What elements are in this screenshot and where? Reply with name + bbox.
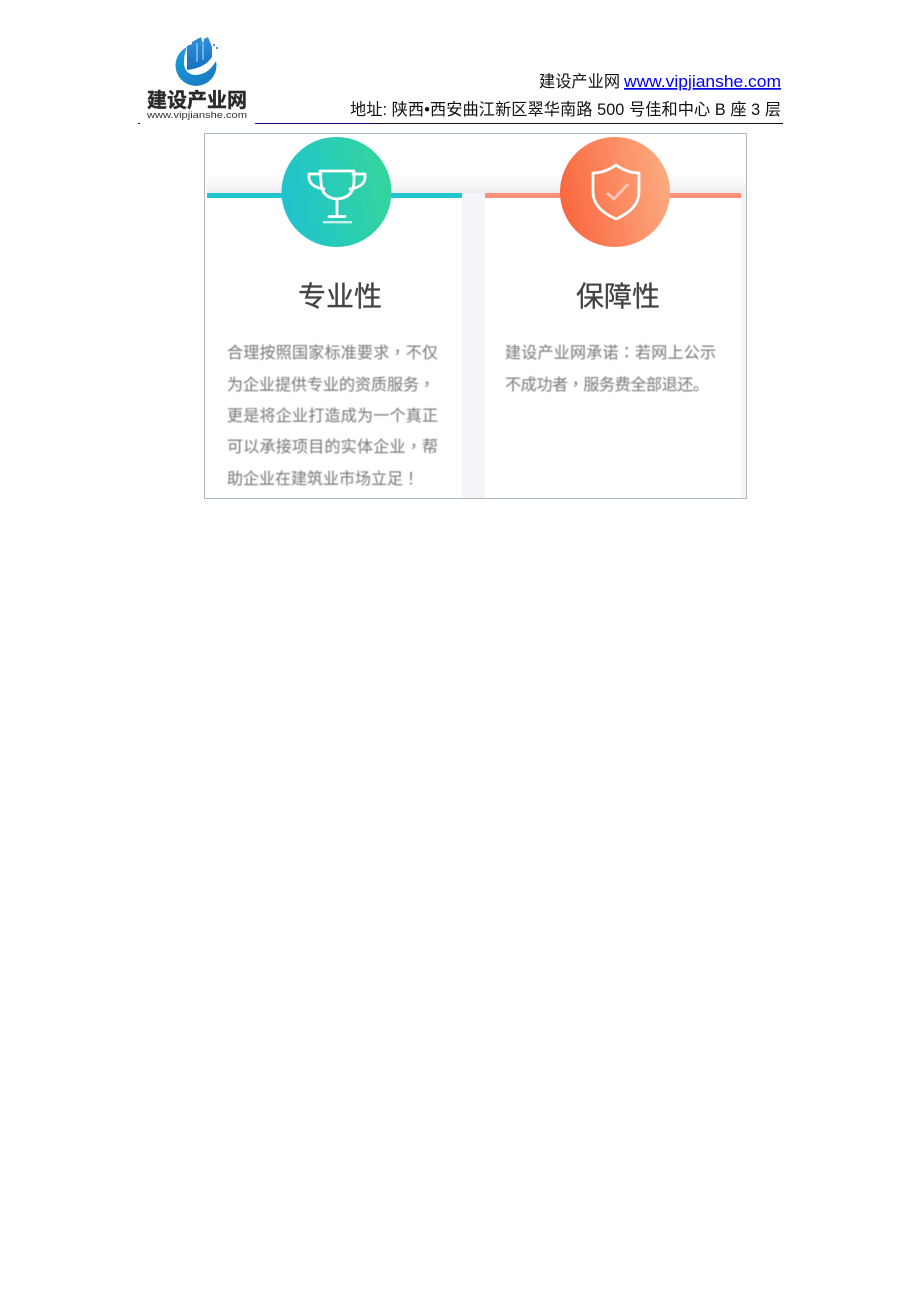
header rule	[138, 123, 783, 124]
body text: 更是将企业打造成为一个真正	[227, 407, 438, 425]
accent bar	[207, 193, 462, 198]
logo	[146, 37, 247, 121]
heading: 保障性	[576, 281, 660, 312]
icon: logo crescent	[175, 47, 216, 86]
logo url: www.vipjianshe.com	[146, 110, 247, 121]
heading: 专业性	[298, 281, 382, 312]
panel: 专业性	[207, 137, 462, 489]
gutter shadow	[462, 193, 485, 498]
body text: 不成功者，服务费全部退还。	[505, 371, 709, 395]
body text: 合理按照国家标准要求，不仅	[227, 339, 438, 363]
icon: logo buildings	[187, 37, 218, 70]
body text: 为企业提供专业的资质服务，	[227, 371, 435, 395]
panel: frame	[204, 134, 746, 498]
body text: 助企业在建筑业市场立足！	[227, 465, 419, 489]
body text: 建设产业网承诺：若网上公示	[505, 339, 716, 363]
band shadow	[207, 175, 746, 193]
body text	[227, 339, 438, 489]
body text: 可以承接项目的实体企业，帮	[227, 433, 438, 457]
site url: www.vipjianshe.com	[623, 72, 781, 91]
accent bar	[485, 193, 741, 198]
icon: shield	[560, 137, 670, 247]
address: 地址: 陕西•西安曲江新区翠华南路 500 号佳和中心 B 座 3 层	[350, 101, 781, 119]
logo wordmark: 建设产业网	[147, 89, 247, 112]
body text	[505, 339, 716, 395]
icon: trophy	[282, 137, 392, 247]
right edge shadow	[741, 193, 746, 498]
header contact text	[350, 72, 781, 119]
site name: 建设产业网	[539, 73, 620, 91]
panel: 保障性	[485, 137, 741, 395]
